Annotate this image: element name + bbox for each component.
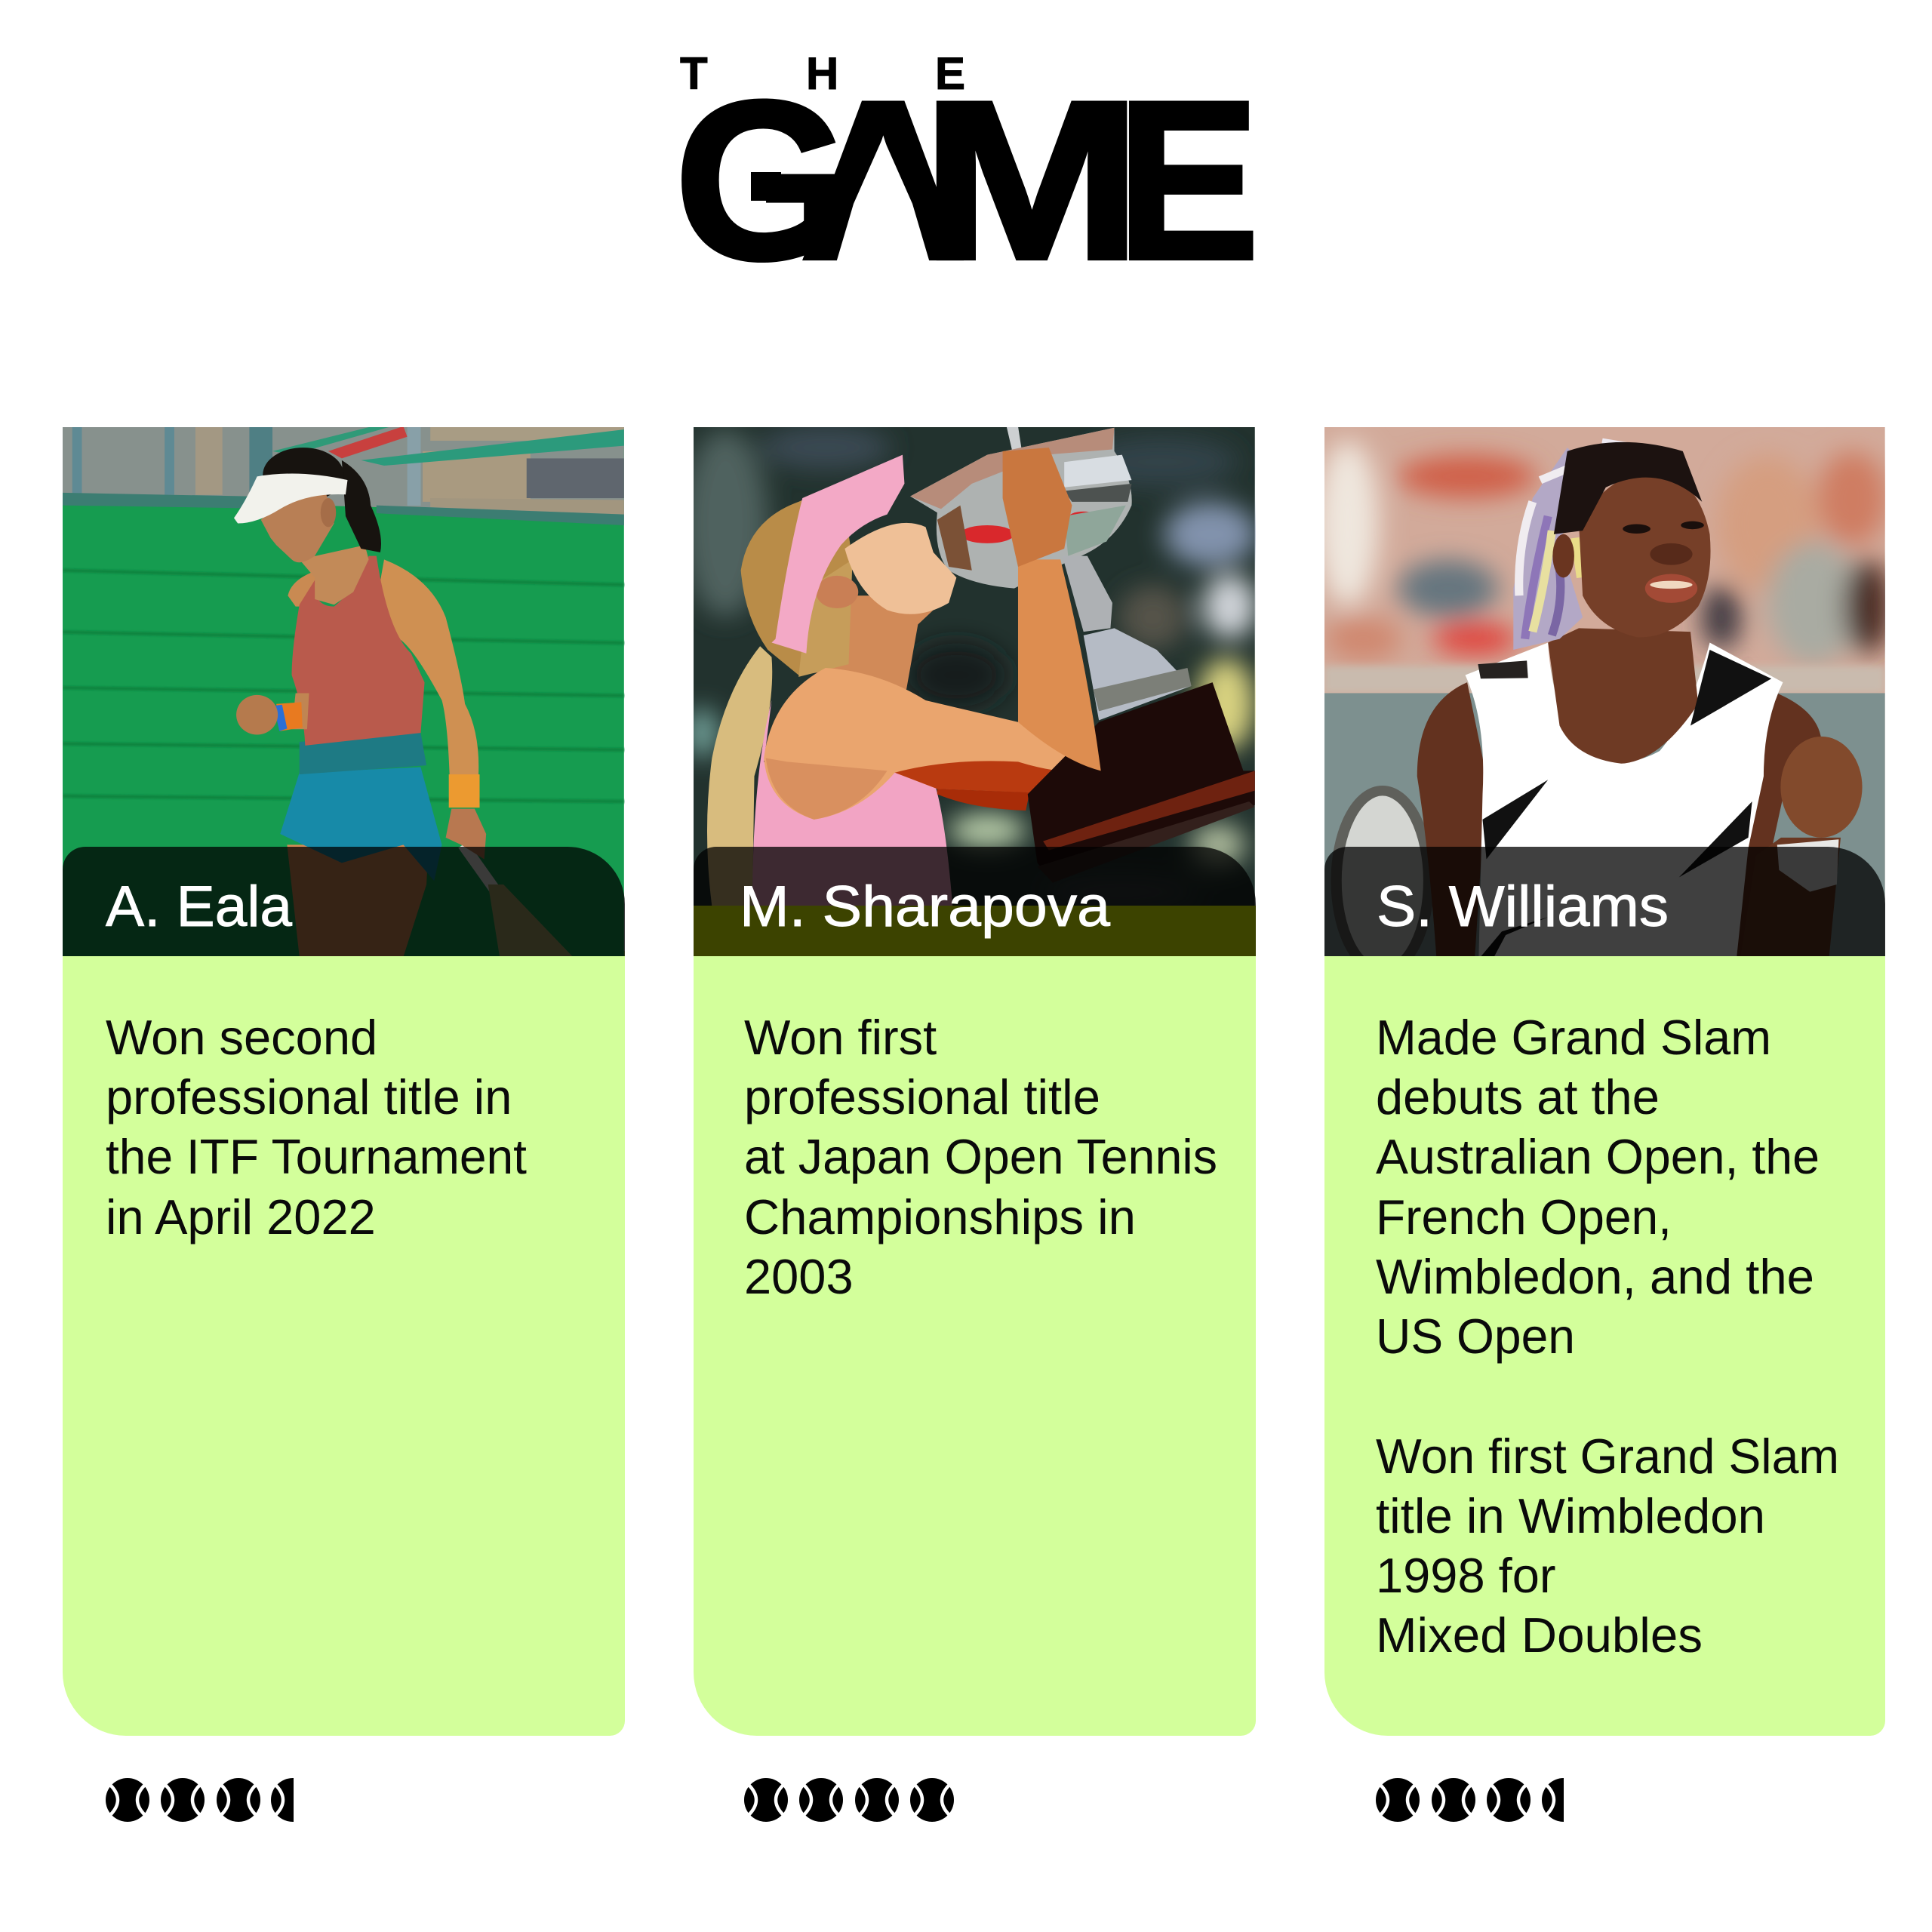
name: A. Eala bbox=[106, 875, 293, 939]
shirt black details bbox=[1478, 650, 1771, 957]
hair behind ear bbox=[798, 559, 853, 677]
name bar bbox=[1324, 847, 1885, 956]
career text: debuts at the bbox=[1376, 1069, 1660, 1124]
icon row: 4 tennis balls bbox=[744, 1778, 954, 1822]
trophy base bbox=[1028, 682, 1255, 883]
upper arm and shoulder bbox=[764, 668, 1066, 820]
career text: US Open bbox=[1376, 1309, 1575, 1364]
career text: at Japan Open Tennis bbox=[744, 1129, 1217, 1184]
name: S. Williams bbox=[1377, 875, 1669, 939]
right arm bbox=[1737, 690, 1821, 957]
career text: title in Wimbledon bbox=[1376, 1488, 1765, 1543]
photo: S. Williams clenching fist bbox=[1317, 426, 1890, 971]
forearm bbox=[1018, 559, 1101, 771]
icon row: 3.5 tennis balls bbox=[1376, 1778, 1586, 1822]
career text bbox=[1376, 1010, 1839, 1663]
photo: A. Eala on court bbox=[63, 426, 624, 957]
title word: THE: E bbox=[935, 48, 965, 99]
panel: M. Sharapova bbox=[683, 426, 1257, 1822]
career text: 1998 for bbox=[1376, 1548, 1556, 1603]
trophy cup bbox=[910, 426, 1132, 589]
photo: M. Sharapova kissing trophy bbox=[683, 426, 1257, 906]
title word: GAME bbox=[675, 54, 1260, 306]
tank top bbox=[292, 556, 425, 746]
forearm bbox=[1740, 838, 1841, 957]
career text: professional title bbox=[744, 1069, 1100, 1124]
card background bbox=[694, 951, 1256, 1736]
trophy stem and foot bbox=[1063, 556, 1192, 720]
face bbox=[844, 523, 956, 614]
career text: in April 2022 bbox=[106, 1189, 376, 1244]
title word: THE: H bbox=[806, 48, 838, 99]
shorts bbox=[280, 768, 442, 881]
raised arm bbox=[380, 559, 478, 776]
icon row: 3.5 tennis balls bbox=[106, 1778, 294, 1822]
title word: GAME: M bbox=[921, 55, 1142, 306]
career text: 2003 bbox=[744, 1249, 854, 1304]
lower name bar strip bbox=[694, 906, 1256, 956]
tank top bbox=[752, 700, 952, 906]
fist bbox=[1780, 737, 1863, 838]
career text: professional title in bbox=[106, 1069, 512, 1124]
career text: Won first Grand Slam bbox=[1376, 1429, 1839, 1484]
legs bbox=[287, 844, 429, 957]
title word: GAME: E bbox=[1117, 54, 1260, 306]
shirt bbox=[1466, 642, 1783, 957]
wrist and fist bbox=[236, 693, 309, 734]
name: M. Sharapova bbox=[740, 875, 1111, 939]
career text: French Open, bbox=[1376, 1189, 1672, 1244]
career text: Won second bbox=[106, 1010, 377, 1065]
career text: Mixed Doubles bbox=[1376, 1607, 1703, 1663]
ponytail bbox=[707, 646, 772, 906]
title word: THE bbox=[680, 48, 965, 99]
chest bbox=[1548, 628, 1698, 764]
career text bbox=[106, 1010, 527, 1244]
card background bbox=[63, 951, 625, 1736]
title word: THE: T bbox=[680, 48, 708, 99]
head bbox=[1552, 442, 1711, 637]
left arm bbox=[1417, 682, 1487, 957]
lower hand and wristband bbox=[446, 774, 486, 860]
racket bbox=[1337, 791, 1429, 971]
name bar bbox=[63, 847, 625, 956]
career text: the ITF Tournament bbox=[106, 1129, 527, 1184]
head and hair bbox=[234, 448, 381, 562]
panel: S. Williams bbox=[1317, 426, 1890, 1822]
hand bbox=[1003, 448, 1072, 567]
card background bbox=[1324, 951, 1885, 1736]
visor bbox=[771, 455, 904, 654]
career text: Championships in bbox=[744, 1189, 1136, 1244]
career text bbox=[744, 1010, 1217, 1304]
career text: Won first bbox=[744, 1010, 937, 1065]
wristband bbox=[1777, 839, 1838, 892]
career text: Wimbledon, and the bbox=[1376, 1249, 1814, 1304]
career text: Made Grand Slam bbox=[1376, 1010, 1771, 1065]
title word: GAME: A bbox=[800, 54, 967, 306]
panel: A. Eala bbox=[63, 426, 625, 1822]
racket bbox=[463, 844, 573, 957]
hair bbox=[741, 500, 851, 675]
beaded braids bbox=[1513, 442, 1679, 650]
title: The Game logo bbox=[675, 48, 1260, 306]
neck bbox=[300, 545, 369, 605]
career text: Australian Open, the bbox=[1376, 1129, 1820, 1184]
title word: GAME: G bbox=[675, 55, 850, 306]
neck bbox=[798, 595, 949, 690]
name bar bbox=[694, 847, 1256, 906]
